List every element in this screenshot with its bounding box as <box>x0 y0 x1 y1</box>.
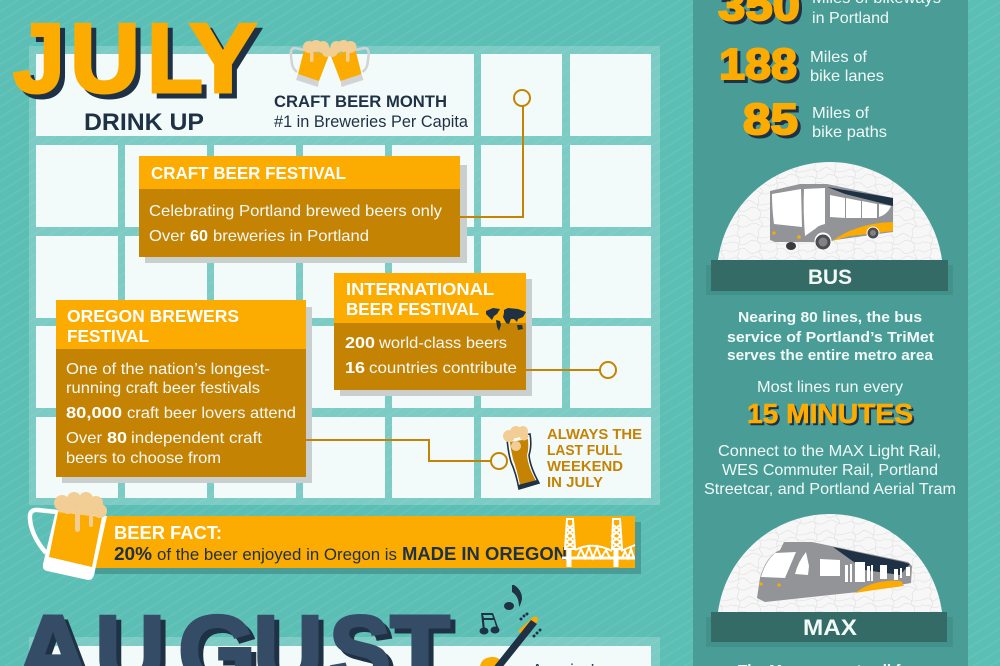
text: bus description: serves the entire metro area <box>727 347 934 364</box>
text: always the last full weekend in July: ALWAYS THE <box>547 426 642 443</box>
stat: 188 miles of bike lanes <box>719 40 884 92</box>
icon: world map <box>486 308 526 331</box>
heading: JULY: Y <box>194 8 262 118</box>
text: craft beer month <box>274 92 469 131</box>
icon: bridge <box>562 519 635 567</box>
stat: 85 miles of bike paths: Miles of <box>812 105 870 122</box>
panel: Oregon Brewers Festival: 80 <box>107 430 127 447</box>
banner: MAX <box>706 612 953 647</box>
icon: bus on contour dome <box>718 160 942 260</box>
text: craft beer month: CRAFT BEER MONTH <box>274 92 447 111</box>
panel: craft beer festival: 60 <box>190 228 208 245</box>
stat: 350 miles of bikeways <box>718 0 941 33</box>
subheading: Drink up: DRINK UP <box>84 109 204 136</box>
text: bus description: Nearing 80 lines, the bus <box>738 309 922 326</box>
text: bus description <box>727 309 934 364</box>
panel: Oregon Brewers Festival: beers to choose from <box>66 450 221 467</box>
stat: 15 minutes: 15 MINUTES <box>747 398 913 429</box>
panel: August calendar <box>29 637 660 666</box>
text: connections: Streetcar, and Portland Aerial Tram <box>704 481 956 498</box>
text: always the last full weekend in July: IN JULY <box>547 474 603 491</box>
banner: MAX: MAX <box>803 615 857 640</box>
panel: Oregon Brewers Festival: One of the nation’s longest- <box>66 361 270 378</box>
icon: music notes <box>480 585 522 634</box>
panel: international beer festival: BEER FESTIVAL <box>346 299 479 319</box>
panel: craft beer festival: CRAFT BEER FESTIVAL <box>151 163 346 183</box>
panel: international beer festival: countries contribute <box>369 360 517 377</box>
icon: pint glass <box>503 426 539 489</box>
stat: 188 miles of bike lanes: 188 <box>719 40 797 89</box>
panel: Oregon Brewers Festival: independent craft <box>131 430 263 447</box>
heading: JULY: L <box>147 3 203 113</box>
text: connections: WES Commuter Rail, Portland <box>722 462 938 479</box>
heading: AUGUST <box>16 595 455 666</box>
panel: Oregon Brewers Festival <box>56 300 312 483</box>
banner: beer fact: BEER FACT: <box>114 523 222 543</box>
text: always the last full weekend in July: WEEKEND <box>547 458 623 475</box>
banner: beer fact: MADE IN OREGON <box>402 543 567 564</box>
panel: July calendar <box>29 46 660 505</box>
banner: beer fact: 20% <box>114 544 152 564</box>
stat: 188 miles of bike lanes: Miles of <box>810 49 868 66</box>
panel: international beer festival: 16 <box>345 360 365 377</box>
text: always the last full weekend in July <box>547 426 642 491</box>
heading: JULY: L <box>152 8 208 118</box>
panel: craft beer festival: breweries in Portland <box>213 228 369 245</box>
stat: 85 miles of bike paths: bike paths <box>812 124 887 141</box>
stat: 15 minutes: 15 MINUTES <box>749 400 915 431</box>
panel: Oregon Brewers Festival: craft beer lovers attend <box>127 405 296 422</box>
panel: Oregon Brewers Festival: 80,000 <box>66 405 122 422</box>
banner: beer fact <box>95 516 641 574</box>
panel: craft beer festival <box>139 156 467 263</box>
panel: Oregon Brewers Festival: running craft beer festivals <box>66 380 260 397</box>
connector: Oregon Brewers Festival <box>306 440 507 469</box>
panel: international beer festival <box>334 273 532 396</box>
panel: international beer festival: INTERNATIONAL <box>346 279 494 299</box>
heading: JULY: J <box>18 8 70 118</box>
icon: MAX train on contour dome <box>718 512 942 612</box>
banner: BUS <box>706 260 953 295</box>
heading: JULY: J <box>13 3 65 113</box>
stat: 85 miles of bike paths: 85 <box>746 98 801 147</box>
connector: international beer festival <box>526 362 616 378</box>
connector: craft beer festival <box>460 90 530 217</box>
panel: international beer festival: 200 <box>345 335 375 352</box>
banner: BUS: BUS <box>808 266 852 289</box>
icon: guitar <box>480 612 542 666</box>
heading: JULY: U <box>75 8 145 118</box>
stat: 85 miles of bike paths <box>743 95 887 147</box>
icon: large beer mug <box>30 492 107 580</box>
text: connections <box>704 443 956 498</box>
panel: Oregon Brewers Festival: Over <box>66 430 103 447</box>
heading: JULY <box>13 3 262 118</box>
panel: Oregon Brewers Festival: FESTIVAL <box>67 326 149 346</box>
text: craft beer month: #1 in Breweries Per Capita <box>274 113 469 131</box>
panel: craft beer festival: Celebrating Portland brewed beers only <box>149 203 442 220</box>
stat: 350 miles of bikeways: in Portland <box>812 10 889 27</box>
heading: JULY: U <box>70 3 140 113</box>
text: connections: Connect to the MAX Light Rail, <box>718 443 941 460</box>
text: most lines run every: Most lines run every <box>757 379 903 396</box>
banner: beer fact: of the beer enjoyed in Oregon is <box>157 546 397 564</box>
heading: JULY: Y <box>189 3 257 113</box>
text: always the last full weekend in July: LAST FULL <box>547 442 622 459</box>
panel: international beer festival: world-class beers <box>378 335 507 352</box>
panel: craft beer festival: Over <box>149 228 186 245</box>
panel: Oregon Brewers Festival: OREGON BREWERS <box>67 306 239 326</box>
stat: 85 miles of bike paths: 85 <box>743 95 798 144</box>
panel: transport sidebar <box>693 0 968 666</box>
stat: 188 miles of bike lanes: 188 <box>722 43 800 92</box>
icon: clinking beer mugs <box>291 40 369 87</box>
text: bus description: service of Portland’s TriMet <box>727 329 934 346</box>
stat: 188 miles of bike lanes: bike lanes <box>810 68 884 85</box>
